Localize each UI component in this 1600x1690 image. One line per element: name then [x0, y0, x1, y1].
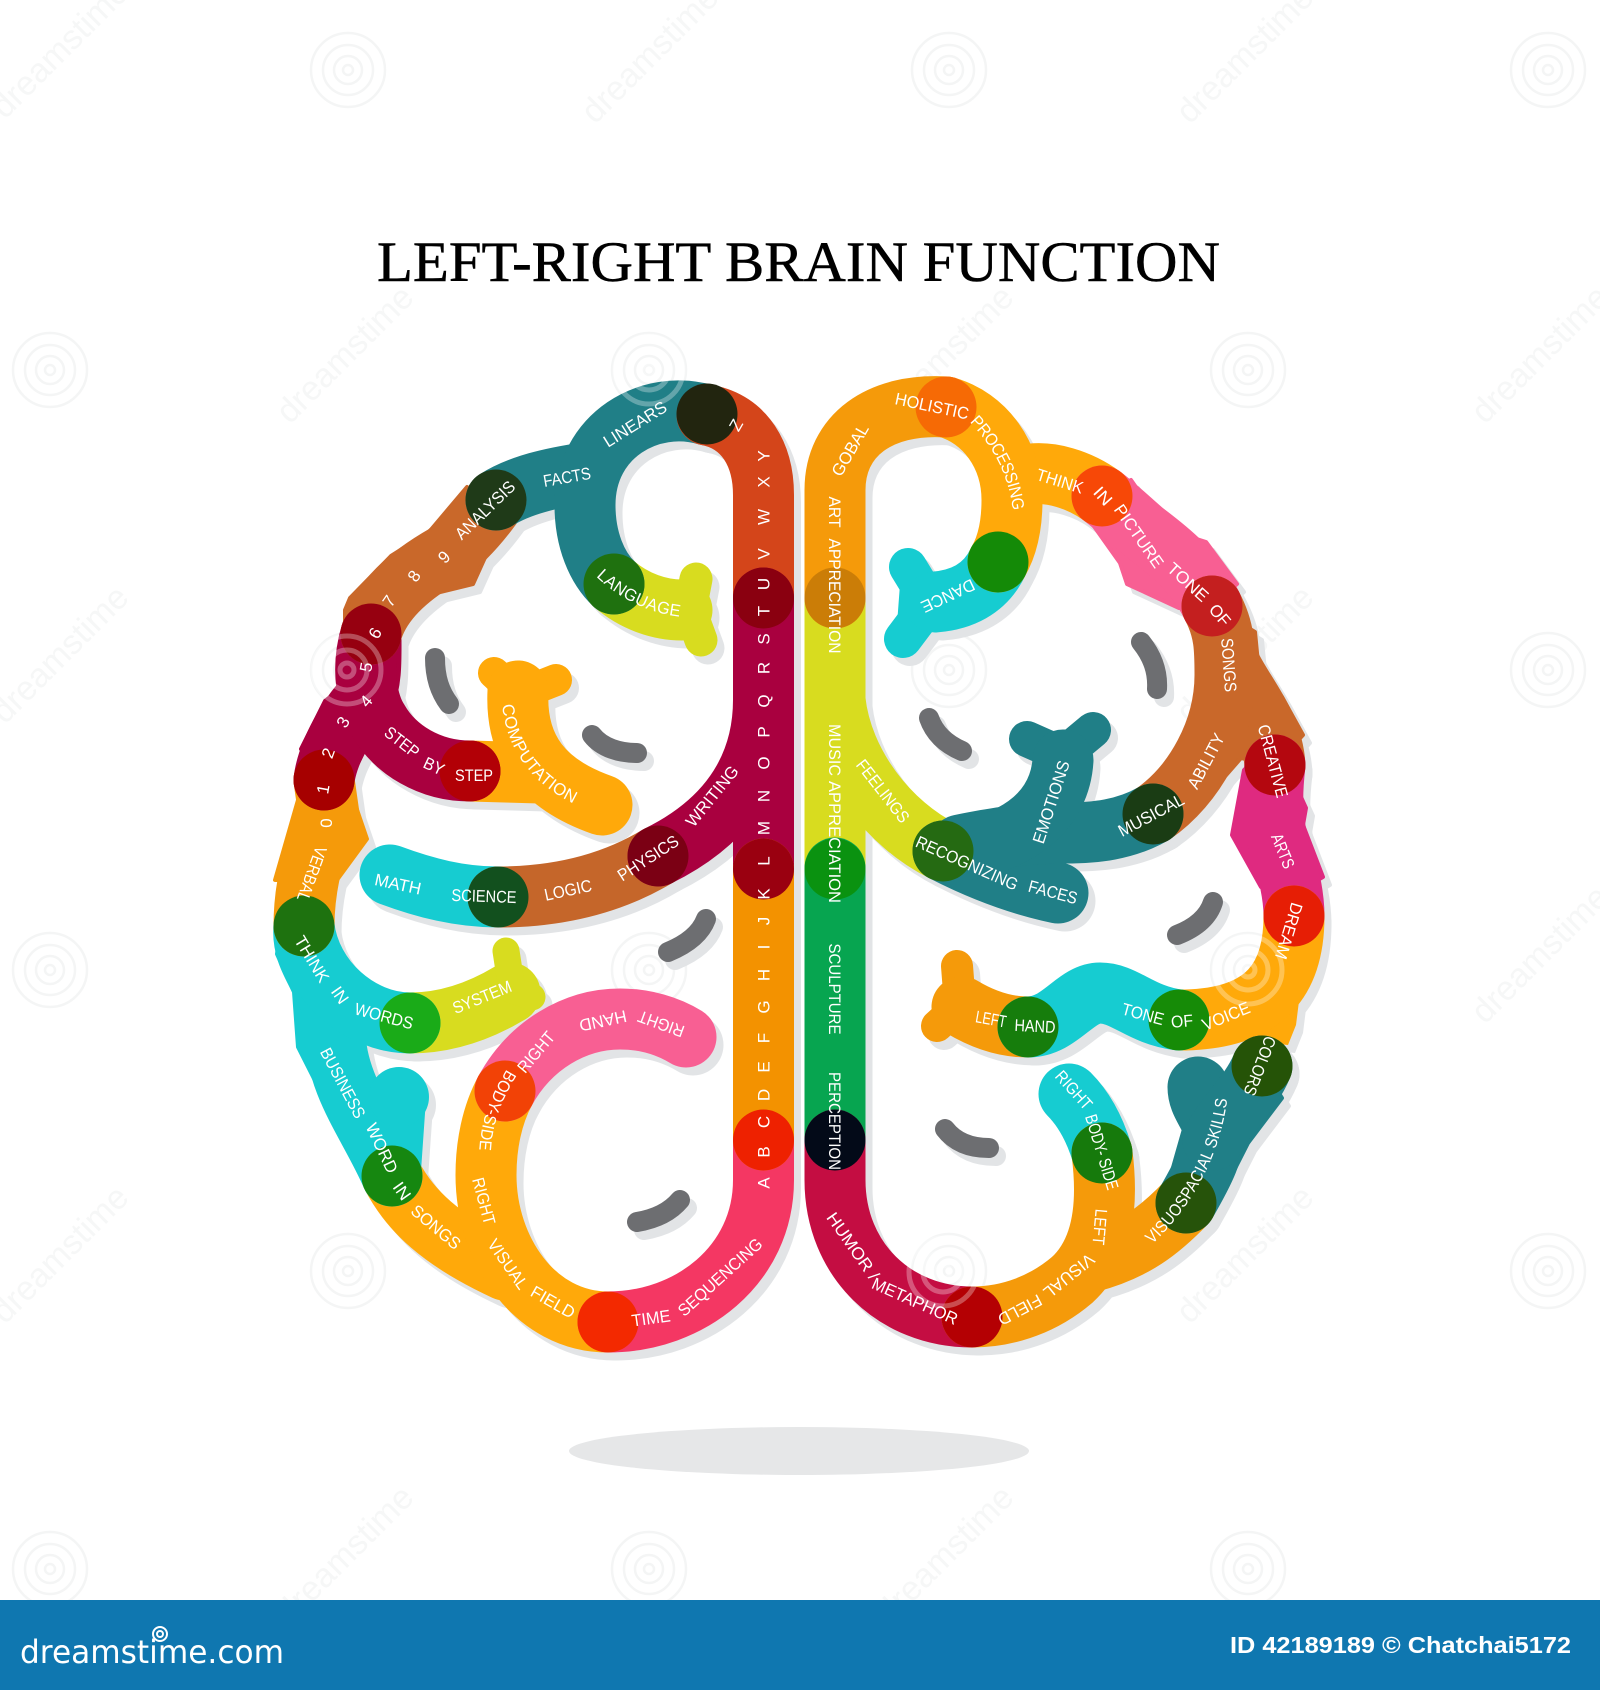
band: arts magenta pink: [1232, 740, 1323, 916]
label sequencing: SEQUENCING: [674, 1234, 766, 1320]
label facts: FACTS: [542, 464, 592, 491]
label analysis: ANALYSIS: [451, 477, 519, 544]
label ability: ABILITY: [1184, 730, 1229, 792]
label picture: PICTURE: [1110, 501, 1167, 572]
label arts: ARTS: [1267, 831, 1298, 871]
band: right visual field: [486, 1091, 608, 1322]
panel: right hemisphere bands: [835, 407, 1323, 1317]
label computation: COMPUTATION: [502, 704, 578, 803]
label recognizing: RECOGNIZING: [913, 832, 1021, 894]
alphabet column A to Y: ABCDEFGHIJKLMNOPQRSTUVWXY: [754, 450, 774, 1189]
band: global orange: [835, 407, 946, 598]
band: linears loop teal: [585, 411, 707, 584]
band: step by step magenta: [366, 634, 470, 771]
label holistic: HOLISTIC: [893, 389, 971, 424]
band: verbal orange: [275, 780, 367, 926]
label music: MUSIC: [825, 724, 844, 776]
label appreciation 2: APPRECIATION: [825, 781, 844, 903]
band: alphabet magenta: [733, 598, 794, 869]
number 5: 5: [356, 661, 377, 673]
label in picture: IN: [1089, 483, 1116, 510]
label step 2: STEP: [455, 766, 493, 785]
band: think orange: [1025, 474, 1102, 496]
footer logo: dreamstime.com: [20, 1633, 284, 1671]
band: visuospacial teal: [1172, 1066, 1282, 1215]
band: musical teal: [960, 814, 1153, 845]
title: LEFT-RIGHT BRAIN FUNCTION: [377, 231, 1220, 294]
background watermark pattern: dreamstime: [1169, 1178, 1321, 1331]
band: visuospacial orange: [1090, 1203, 1186, 1262]
footer bar: [0, 1600, 1600, 1690]
label body-side: BODY- SIDE: [1081, 1112, 1122, 1192]
label hand: HAND: [1014, 1016, 1056, 1037]
band: left visual field orange: [972, 1153, 1104, 1317]
band: system lime with knobs: [410, 951, 532, 1023]
band: music appreciation lime: [804, 598, 866, 868]
number 9: 9: [434, 547, 454, 567]
number 1: 1: [313, 783, 334, 795]
label creative: CREATIVE: [1254, 722, 1291, 800]
nodes: right hemisphere circles: [804, 376, 1324, 1348]
band: time sequencing: [608, 1140, 764, 1322]
label processing: PROCESSING: [970, 415, 1024, 510]
letter Z: Z: [726, 416, 747, 434]
background watermark pattern: dreamstime: [1169, 578, 1321, 731]
label songs: SONGS: [1217, 637, 1240, 693]
number 0: 0: [317, 818, 336, 828]
label in songs: IN: [389, 1178, 415, 1204]
label colors: COLORS: [1240, 1033, 1280, 1098]
label physics: PHYSICS: [614, 832, 682, 885]
label sculpture: SCULPTURE: [825, 944, 844, 1034]
band: humor crimson: [835, 1140, 972, 1317]
label songs: SONGS: [407, 1201, 464, 1254]
label field: FIELD: [527, 1282, 578, 1323]
label time: TIME: [630, 1306, 672, 1331]
band: alphabet orange: [733, 869, 794, 1140]
band: alphabet top red-orange: [707, 415, 764, 598]
number 6: 6: [365, 624, 386, 642]
label word: WORD: [362, 1120, 401, 1176]
band: computation with knobs: [470, 673, 602, 805]
label body-side: BODY-SIDE: [479, 1070, 516, 1150]
band: feelings lime: [835, 700, 943, 851]
label musical: MUSICAL: [1115, 790, 1187, 841]
band: dance cyan with knobs: [903, 562, 998, 639]
background watermark pattern: dreamstime: [869, 1478, 1021, 1631]
band: business cyan with blob: [277, 926, 429, 1176]
band: creative branch brown: [1200, 606, 1303, 790]
number 2: 2: [318, 745, 339, 761]
label right visual: RIGHT: [468, 1175, 499, 1227]
label tone voice: TONE: [1120, 1000, 1166, 1029]
label verbal: VERBAL: [293, 844, 330, 904]
band: visual field to songs: [392, 1176, 505, 1270]
label think: THINK: [1034, 465, 1086, 498]
label math: MATH: [373, 870, 423, 899]
label voice: VOICE: [1199, 998, 1253, 1035]
band: emotions teal with knobs: [965, 730, 1093, 850]
label gobal: GOBAL: [828, 421, 873, 480]
label dance: DANCE: [918, 575, 978, 616]
band: songs brown: [1153, 606, 1225, 814]
label think: THINK: [290, 932, 333, 987]
label field: FIELD: [995, 1290, 1045, 1329]
label visuospacial skills: VISUOSPACIAL SKILLS: [1144, 1098, 1227, 1242]
background watermark pattern: dreamstime: [269, 1478, 421, 1631]
label left hand: LEFT: [974, 1007, 1008, 1031]
label linears: LINEARS: [600, 398, 670, 451]
footer logo ring: [153, 1627, 167, 1641]
label words: WORDS: [352, 999, 415, 1033]
band: language lime with knobs: [614, 579, 701, 640]
brain illustration: bands and nodes: [274, 376, 1324, 1352]
panel: left hemisphere bands: [275, 411, 764, 1322]
label science: SCIENCE: [451, 886, 517, 907]
label right hand: RIGHT: [635, 1006, 687, 1041]
label writing: WRITING: [682, 762, 743, 831]
band: writing magenta: [658, 700, 764, 856]
band: logic brown: [498, 856, 658, 897]
label right body: RIGHT: [514, 1028, 559, 1077]
band: colors teal: [1213, 1066, 1262, 1140]
band: dream orange: [1179, 916, 1301, 1045]
label appreciation 1: APPRECIATION: [825, 538, 844, 654]
label art: ART: [825, 496, 844, 528]
band: processing orange: [946, 407, 1012, 562]
label visual: VISUAL: [484, 1235, 532, 1293]
label language: LANGUAGE: [597, 568, 680, 617]
label dream: DREAM: [1271, 900, 1306, 961]
number 4: 4: [356, 692, 377, 711]
labels: right hemisphere: [822, 389, 1306, 1329]
label hand: HAND: [577, 1006, 628, 1035]
label logic: LOGIC: [543, 876, 594, 905]
watermark overlay on brain: [313, 336, 1282, 1306]
label in: IN: [327, 983, 352, 1008]
band: think in words cyan: [304, 926, 410, 1023]
label of: OF: [1205, 600, 1234, 630]
band: numbers brown: [345, 487, 501, 650]
label humor: HUMOR /: [822, 1209, 883, 1284]
label step 1: STEP: [381, 723, 423, 762]
label by: BY: [420, 753, 447, 779]
number 8: 8: [404, 567, 425, 586]
footer image id: ID 42189189 © Chatchai5172: [1230, 1632, 1571, 1658]
label emotions: EMOTIONS: [1029, 758, 1074, 846]
label perception: PERCEPTION: [825, 1072, 844, 1170]
band: right hand pink: [505, 1019, 686, 1091]
band: facts teal: [496, 472, 590, 500]
label of voice: OF: [1170, 1011, 1194, 1032]
band: numbers magenta: [301, 634, 395, 780]
label faces: FACES: [1026, 877, 1079, 908]
labels: left hemisphere: [290, 398, 774, 1331]
band: faces teal: [943, 851, 1058, 893]
number 7: 7: [379, 592, 400, 611]
ground shadow under brain: [569, 1427, 1029, 1475]
number 3: 3: [333, 713, 354, 731]
label metaphor: METAPHOR: [869, 1274, 961, 1329]
band: right body side cyan: [1069, 1094, 1102, 1153]
band: math cyan: [390, 875, 498, 897]
nodes: left hemisphere circles: [274, 384, 794, 1352]
band: sculpture green: [804, 868, 866, 1140]
label feelings: FEELINGS: [852, 756, 913, 827]
label right body: RIGHT: [1051, 1067, 1096, 1114]
band: left hand orange with knobs: [937, 966, 1028, 1027]
background watermark pattern: dreamstime: [269, 278, 421, 431]
band: tone of voice cyan: [1028, 993, 1179, 1027]
grey fold strokes: [435, 642, 1213, 1222]
label left visual: LEFT: [1089, 1208, 1111, 1246]
background watermark pattern: dreamstime: [869, 278, 1021, 431]
band: picture pink: [1093, 480, 1237, 608]
label business: BUSINESS: [316, 1045, 369, 1122]
label system: SYSTEM: [450, 977, 514, 1018]
label visual: VISUAL: [1039, 1249, 1098, 1302]
label tone: TONE: [1163, 559, 1212, 606]
